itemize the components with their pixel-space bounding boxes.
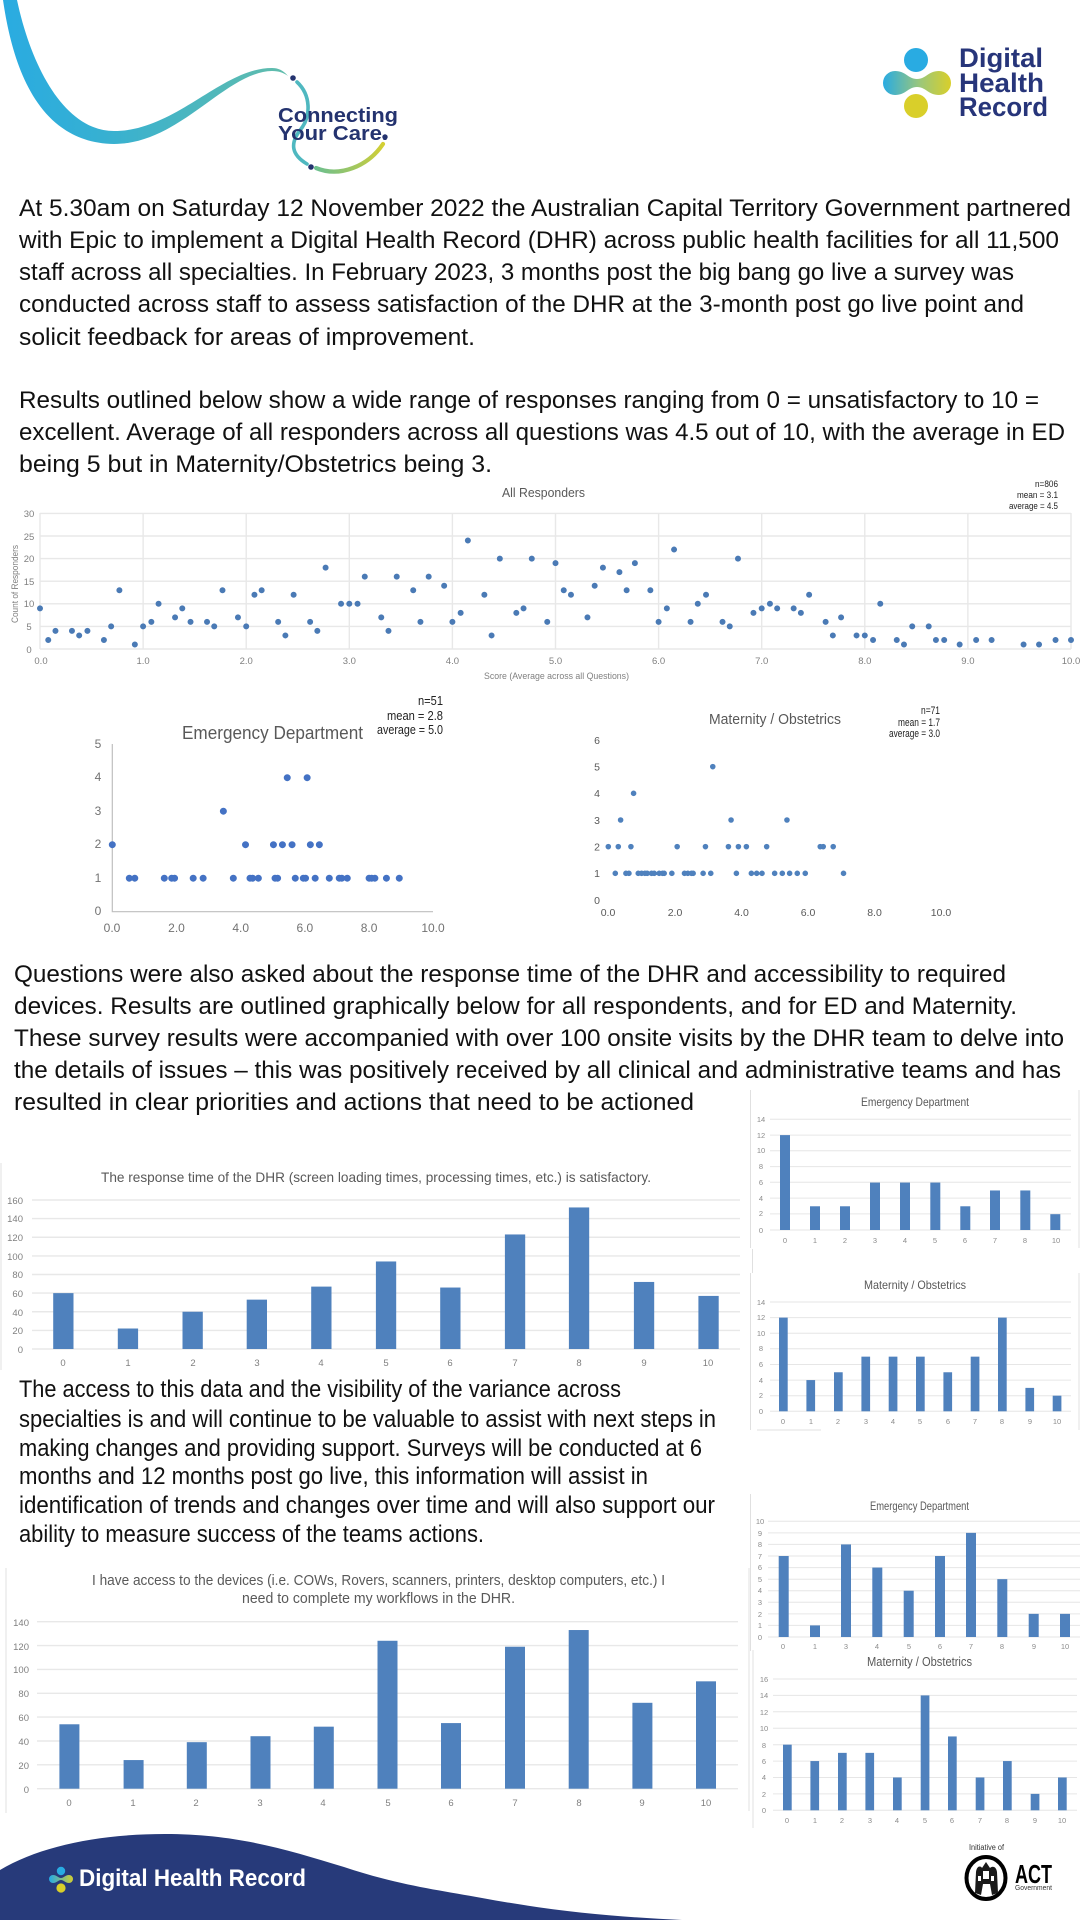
bars bbox=[53, 1207, 719, 1349]
y axis labels: 3 bbox=[95, 804, 102, 818]
scatter chart: Emergency Department bbox=[95, 694, 445, 935]
x axis labels: 10.0 bbox=[931, 907, 951, 919]
footer logo icon bbox=[49, 1867, 73, 1893]
x axis labels: 9 bbox=[639, 1798, 645, 1809]
x axis labels: 4 bbox=[318, 1358, 324, 1369]
y axis labels: 40 bbox=[18, 1737, 29, 1748]
scatter chart: Maternity / Obstetrics bbox=[594, 705, 951, 919]
y axis labels bbox=[7, 1196, 23, 1356]
logo wording: Your Care. bbox=[278, 122, 388, 145]
ring arc and dots bbox=[290, 75, 388, 172]
y axis labels: 140 bbox=[7, 1214, 23, 1225]
x axis labels: 7.0 bbox=[755, 656, 768, 667]
x axis labels: 7 bbox=[973, 1417, 977, 1426]
y axis labels: 1 bbox=[758, 1621, 762, 1630]
chart title: need to complete my workflows in the DHR. bbox=[242, 1590, 515, 1607]
logo: ACT Government: ACT bbox=[1015, 1859, 1052, 1889]
x axis labels: 1 bbox=[813, 1236, 817, 1245]
y axis labels bbox=[756, 1517, 764, 1642]
x axis labels: 5 bbox=[923, 1816, 927, 1825]
stats: n=806 bbox=[1035, 479, 1058, 489]
logo: ACT Government: Initiative of bbox=[969, 1843, 1005, 1852]
x axis labels: 8 bbox=[1023, 1236, 1027, 1245]
x axis labels: 0 bbox=[785, 1816, 789, 1825]
y axis labels: 0 bbox=[95, 904, 102, 918]
bars bbox=[779, 1318, 1061, 1411]
text block: next steps: specialties is and will continue to be valuable to assist with next steps in bbox=[19, 1406, 716, 1433]
x axis labels: 10 bbox=[1052, 1236, 1060, 1245]
x axis labels: 5 bbox=[907, 1642, 911, 1651]
x axis labels: 5 bbox=[385, 1798, 391, 1809]
y axis labels bbox=[757, 1115, 765, 1235]
y axis labels: 12 bbox=[757, 1313, 765, 1322]
y axis labels: 4 bbox=[758, 1586, 762, 1595]
chart title bbox=[92, 1572, 665, 1607]
y axis labels: 10 bbox=[760, 1724, 768, 1733]
y axis labels: 80 bbox=[18, 1689, 29, 1700]
x axis labels: 0.0 bbox=[601, 907, 615, 919]
logo: Connecting Your Care bbox=[3, 0, 398, 172]
x axis labels: 10 bbox=[1061, 1642, 1069, 1651]
y axis labels: 20 bbox=[18, 1761, 29, 1772]
y axis labels: 0 bbox=[594, 895, 600, 907]
x axis labels: 6.0 bbox=[801, 907, 815, 919]
y axis labels: 6 bbox=[759, 1178, 763, 1187]
x axis labels bbox=[785, 1816, 1066, 1825]
y axis labels: 0 bbox=[758, 1633, 762, 1642]
y axis labels: 1 bbox=[594, 868, 600, 880]
stats bbox=[1009, 479, 1058, 511]
y axis labels: 30 bbox=[24, 509, 34, 520]
x axis labels bbox=[781, 1642, 1069, 1651]
y axis labels: 140 bbox=[13, 1618, 29, 1629]
x axis labels bbox=[781, 1417, 1061, 1426]
x axis labels: 4.0 bbox=[734, 907, 749, 919]
x axis labels: 9 bbox=[641, 1358, 647, 1369]
y axis labels: 8 bbox=[758, 1540, 762, 1549]
bars bbox=[783, 1695, 1067, 1810]
x axis labels: 2 bbox=[843, 1236, 847, 1245]
x axis labels: 6 bbox=[946, 1417, 950, 1426]
stats bbox=[377, 694, 443, 737]
x axis labels: 8.0 bbox=[858, 656, 871, 667]
y axis labels: 8 bbox=[759, 1344, 763, 1353]
stats: n=51 bbox=[418, 694, 443, 708]
text block: introduction: staff across all specialties. In February 2023, 3 months post the big bang go live a survey was bbox=[19, 259, 1014, 286]
x axis labels: 7 bbox=[512, 1798, 518, 1809]
x axis title: Score (Average across all Questions) bbox=[484, 671, 629, 682]
y axis labels: 6 bbox=[759, 1360, 763, 1369]
x axis labels: 1 bbox=[813, 1816, 817, 1825]
y axis labels bbox=[760, 1675, 768, 1815]
text block: introduction bbox=[18, 195, 1071, 351]
stats: average = 5.0 bbox=[377, 723, 443, 737]
text block: introduction: with Epic to implement a Digital Health Record (DHR) across public health facilities for all 11,500 bbox=[18, 227, 1059, 254]
logo: ACT Government bbox=[966, 1843, 1052, 1899]
x axis labels: 2 bbox=[190, 1358, 196, 1369]
y axis labels: 2 bbox=[762, 1790, 766, 1799]
x axis labels: 6 bbox=[950, 1816, 954, 1825]
x axis labels: 1 bbox=[125, 1358, 131, 1369]
x axis labels: 8 bbox=[1000, 1642, 1004, 1651]
x axis labels bbox=[60, 1358, 713, 1369]
bars bbox=[779, 1533, 1070, 1637]
bar chart: device access, Maternity / Obstetrics bbox=[753, 1650, 1077, 1828]
chart title: The response time of the DHR (screen loading times, processing times, etc.) is satisfactory. bbox=[101, 1169, 651, 1185]
x axis labels: 6 bbox=[963, 1236, 967, 1245]
data points bbox=[608, 767, 844, 873]
x axis labels bbox=[66, 1798, 711, 1809]
chart title: Emergency Department bbox=[182, 723, 363, 743]
x axis labels: 4.0 bbox=[446, 656, 459, 667]
chart title: All Responders bbox=[502, 485, 585, 500]
x axis labels: 6 bbox=[447, 1358, 453, 1369]
x axis labels bbox=[34, 656, 1080, 667]
logo: Digital Health Record: Digital bbox=[959, 43, 1043, 73]
x axis labels: 0 bbox=[60, 1358, 66, 1369]
x axis labels: 2 bbox=[840, 1816, 844, 1825]
footer band: Digital Health Record bbox=[0, 1834, 682, 1920]
y axis labels: 16 bbox=[760, 1675, 768, 1684]
swoosh bbox=[3, 0, 288, 144]
y axis labels: 4 bbox=[95, 770, 102, 784]
y axis labels: 7 bbox=[758, 1552, 762, 1561]
y axis labels bbox=[95, 737, 102, 918]
x axis labels: 3 bbox=[868, 1816, 872, 1825]
x axis labels: 2.0 bbox=[668, 907, 682, 919]
y axis labels: 40 bbox=[12, 1308, 23, 1319]
y axis labels: 2 bbox=[759, 1209, 763, 1218]
stats: mean = 2.8 bbox=[387, 709, 443, 723]
bar chart: device access, Emergency Department bbox=[750, 1494, 1080, 1651]
chart title: I have access to the devices (i.e. COWs, Rovers, scanners, printers, desktop computers, etc.) I bbox=[92, 1572, 665, 1589]
y axis labels: 10 bbox=[757, 1329, 765, 1338]
scatter chart: All Responders bbox=[10, 479, 1080, 682]
x axis labels: 2 bbox=[836, 1417, 840, 1426]
y axis labels bbox=[24, 509, 34, 656]
y axis labels: 5 bbox=[758, 1575, 762, 1584]
x axis labels: 9.0 bbox=[961, 656, 975, 667]
logo wording bbox=[278, 104, 398, 145]
chart title: Maternity / Obstetrics bbox=[709, 711, 841, 728]
y axis labels: 80 bbox=[12, 1270, 23, 1281]
y axis labels bbox=[594, 735, 600, 907]
y axis title: Count of Responders bbox=[10, 545, 21, 623]
text block: response time and accessibility: resulted in clear priorities and actions that need to be actioned bbox=[14, 1089, 694, 1116]
data points bbox=[40, 541, 1071, 644]
x axis labels: 8 bbox=[576, 1798, 582, 1809]
logo: Digital Health Record: Record bbox=[959, 92, 1048, 122]
x axis labels: 10.0 bbox=[421, 921, 445, 935]
bars bbox=[59, 1630, 716, 1789]
x axis labels: 5 bbox=[933, 1236, 937, 1245]
x axis labels: 3 bbox=[864, 1417, 868, 1426]
text block: next steps: The access to this data and the visibility of the variance across bbox=[19, 1376, 621, 1403]
y axis labels: 0 bbox=[759, 1226, 763, 1235]
y axis labels: 14 bbox=[757, 1298, 765, 1307]
x axis labels: 10.0 bbox=[1062, 656, 1080, 667]
chart title: Maternity / Obstetrics bbox=[864, 1278, 966, 1292]
x axis labels: 2.0 bbox=[168, 921, 185, 935]
x axis labels: 6.0 bbox=[297, 921, 314, 935]
x axis labels: 8.0 bbox=[361, 921, 378, 935]
footer wordmark: Digital Health Record bbox=[79, 1865, 306, 1892]
text block: response time and accessibility: These survey results were accompanied with over 100 onsite visits by the DHR team to delve into bbox=[14, 1025, 1064, 1052]
text block: introduction: solicit feedback for areas of improvement. bbox=[19, 324, 475, 351]
logo: Digital Health Record: Health bbox=[959, 68, 1044, 98]
x axis labels: 0 bbox=[781, 1642, 785, 1651]
x axis labels: 8 bbox=[1000, 1417, 1004, 1426]
y axis labels: 120 bbox=[13, 1642, 29, 1653]
y axis labels: 5 bbox=[594, 762, 600, 774]
y axis labels: 9 bbox=[758, 1529, 762, 1538]
y axis labels: 1 bbox=[95, 871, 102, 885]
stats bbox=[889, 705, 940, 740]
x axis labels bbox=[783, 1236, 1060, 1245]
stats: n=71 bbox=[921, 705, 940, 717]
y axis labels: 25 bbox=[24, 532, 34, 543]
x axis labels: 7 bbox=[978, 1816, 982, 1825]
y axis labels: 6 bbox=[762, 1757, 766, 1766]
y axis labels: 4 bbox=[762, 1773, 766, 1782]
y axis labels: 12 bbox=[760, 1708, 768, 1717]
bar chart: response time, all respondents bbox=[1, 1163, 740, 1370]
stats: mean = 3.1 bbox=[1017, 490, 1058, 500]
y axis labels: 10 bbox=[757, 1146, 765, 1155]
y axis labels: 8 bbox=[762, 1741, 766, 1750]
y axis labels: 4 bbox=[759, 1376, 763, 1385]
logo: Digital Health Record bbox=[883, 43, 1048, 122]
text block: response time and accessibility: the details of issues – this was positively received by all clinical and administrative teams and has bbox=[14, 1057, 1061, 1084]
y axis labels: 8 bbox=[759, 1162, 763, 1171]
x axis labels: 3 bbox=[257, 1798, 263, 1809]
y axis labels: 12 bbox=[757, 1131, 765, 1140]
x axis labels: 4 bbox=[895, 1816, 899, 1825]
y axis labels: 0 bbox=[762, 1806, 766, 1815]
data points bbox=[112, 778, 399, 878]
y axis labels: 60 bbox=[12, 1289, 23, 1300]
bars bbox=[780, 1135, 1060, 1230]
y axis labels: 10 bbox=[24, 599, 34, 610]
bar chart: device access, all respondents bbox=[6, 1568, 749, 1813]
y axis labels: 4 bbox=[759, 1194, 763, 1203]
x axis labels: 8 bbox=[1005, 1816, 1009, 1825]
x axis labels: 8 bbox=[576, 1358, 582, 1369]
y axis labels: 3 bbox=[594, 815, 600, 827]
y axis labels: 10 bbox=[756, 1517, 764, 1526]
y axis labels bbox=[13, 1618, 29, 1796]
stats: average = 4.5 bbox=[1009, 501, 1058, 511]
x axis labels: 7 bbox=[512, 1358, 518, 1369]
text block: response time and accessibility bbox=[14, 961, 1064, 1116]
x axis labels: 9 bbox=[1033, 1816, 1037, 1825]
text block: results summary: excellent. Average of all responders across all questions was 4.5 out of 10, with the average in ED bbox=[19, 419, 1065, 446]
logo wording: Connecting bbox=[278, 104, 398, 127]
text block: next steps: ability to measure success of the teams actions. bbox=[19, 1521, 484, 1548]
chart title: Maternity / Obstetrics bbox=[867, 1654, 972, 1669]
x axis labels: 4 bbox=[903, 1236, 907, 1245]
x axis labels: 1 bbox=[130, 1798, 136, 1809]
x axis labels: 0 bbox=[781, 1417, 785, 1426]
text block: next steps: months and 12 months post go live, this information will assist in bbox=[19, 1463, 648, 1490]
y axis labels bbox=[757, 1298, 765, 1416]
x axis labels: 4 bbox=[875, 1642, 879, 1651]
x axis labels bbox=[601, 907, 951, 919]
stats: mean = 1.7 bbox=[898, 717, 940, 729]
x axis labels: 0.0 bbox=[104, 921, 121, 935]
text block: introduction: conducted across staff to assess satisfaction of the DHR at the 3-month post go live point and bbox=[19, 291, 1024, 318]
x axis labels: 6 bbox=[938, 1642, 942, 1651]
x axis labels: 10 bbox=[701, 1798, 711, 1809]
y axis labels: 3 bbox=[758, 1598, 762, 1607]
y axis labels: 2 bbox=[759, 1391, 763, 1400]
text block: results summary: being 5 but in Maternity/Obstetrics being 3. bbox=[19, 451, 492, 478]
y axis labels: 6 bbox=[758, 1563, 762, 1572]
text block: next steps: identification of trends and changes over time and will also support our bbox=[19, 1492, 715, 1519]
x axis labels bbox=[104, 921, 445, 935]
y axis labels: 60 bbox=[18, 1713, 29, 1724]
x axis labels: 1.0 bbox=[136, 656, 150, 667]
x axis labels: 5.0 bbox=[549, 656, 562, 667]
x axis labels: 9 bbox=[1032, 1642, 1036, 1651]
y axis labels: 4 bbox=[594, 788, 600, 800]
x axis labels: 7 bbox=[969, 1642, 973, 1651]
x axis labels: 4 bbox=[891, 1417, 895, 1426]
text block: response time and accessibility: devices. Results are outlined graphically below for all respondents, and for ED and Maternity. bbox=[14, 993, 1017, 1020]
y axis labels: 15 bbox=[24, 577, 34, 588]
x axis labels: 6 bbox=[448, 1798, 454, 1809]
y axis labels: 0 bbox=[759, 1407, 763, 1416]
y axis labels: 14 bbox=[760, 1691, 768, 1700]
y axis labels: 2 bbox=[95, 837, 102, 851]
x axis labels: 3.0 bbox=[343, 656, 356, 667]
stats: average = 3.0 bbox=[889, 728, 940, 740]
y axis labels: 20 bbox=[12, 1326, 23, 1337]
x axis labels: 4.0 bbox=[232, 921, 249, 935]
bar chart: response time, Maternity / Obstetrics bbox=[750, 1273, 1079, 1430]
x axis labels: 10 bbox=[703, 1358, 713, 1369]
x axis labels: 0.0 bbox=[34, 656, 48, 667]
x axis labels: 3 bbox=[254, 1358, 260, 1369]
y axis labels: 6 bbox=[594, 735, 600, 747]
x axis labels: 1 bbox=[813, 1642, 817, 1651]
y axis labels: 100 bbox=[7, 1252, 23, 1263]
y axis labels: 160 bbox=[7, 1196, 23, 1207]
y axis labels: 5 bbox=[26, 622, 32, 633]
y axis labels: 20 bbox=[24, 554, 34, 565]
x axis labels: 2 bbox=[193, 1798, 199, 1809]
x axis labels: 3 bbox=[844, 1642, 848, 1651]
x axis labels: 3 bbox=[873, 1236, 877, 1245]
y axis labels: 0 bbox=[24, 1785, 29, 1796]
y axis labels: 0 bbox=[26, 645, 32, 656]
x axis labels: 0 bbox=[66, 1798, 72, 1809]
text block: introduction: At 5.30am on Saturday 12 November 2022 the Australian Capital Territory Government partnered bbox=[19, 195, 1071, 222]
x axis labels: 6.0 bbox=[652, 656, 665, 667]
y axis labels: 14 bbox=[757, 1115, 765, 1124]
bar chart: response time, Emergency Department bbox=[750, 1090, 1079, 1273]
text block: results summary: Results outlined below show a wide range of responses ranging from 0 = unsatisfactory to 10 = bbox=[19, 387, 1039, 414]
x axis labels: 10 bbox=[1058, 1816, 1066, 1825]
x axis labels: 0 bbox=[783, 1236, 787, 1245]
x axis labels: 1 bbox=[809, 1417, 813, 1426]
text block: next steps: making changes and providing support. Surveys will be conducted at 6 bbox=[19, 1435, 702, 1462]
text block: next steps bbox=[19, 1376, 716, 1548]
x axis labels: 5 bbox=[918, 1417, 922, 1426]
text block: response time and accessibility: Questions were also asked about the response time of the DHR and accessibility to required bbox=[14, 961, 1006, 988]
y axis labels: 120 bbox=[7, 1233, 23, 1244]
y axis labels: 5 bbox=[95, 737, 102, 751]
chart title: Emergency Department bbox=[870, 1499, 970, 1513]
x axis labels: 9 bbox=[1028, 1417, 1032, 1426]
x axis labels: 7 bbox=[993, 1236, 997, 1245]
x axis labels: 2.0 bbox=[240, 656, 253, 667]
y axis labels: 0 bbox=[18, 1345, 23, 1356]
x axis labels: 8.0 bbox=[867, 907, 882, 919]
x axis labels: 10 bbox=[1053, 1417, 1061, 1426]
text block: results summary bbox=[19, 387, 1065, 478]
logo: ACT Government: Government bbox=[1015, 1885, 1052, 1892]
x axis labels: 4 bbox=[320, 1798, 326, 1809]
chart title: Emergency Department bbox=[861, 1095, 970, 1109]
x axis labels: 5 bbox=[383, 1358, 389, 1369]
y axis labels: 2 bbox=[758, 1610, 762, 1619]
y axis labels: 100 bbox=[13, 1665, 29, 1676]
y axis labels: 2 bbox=[594, 842, 600, 854]
